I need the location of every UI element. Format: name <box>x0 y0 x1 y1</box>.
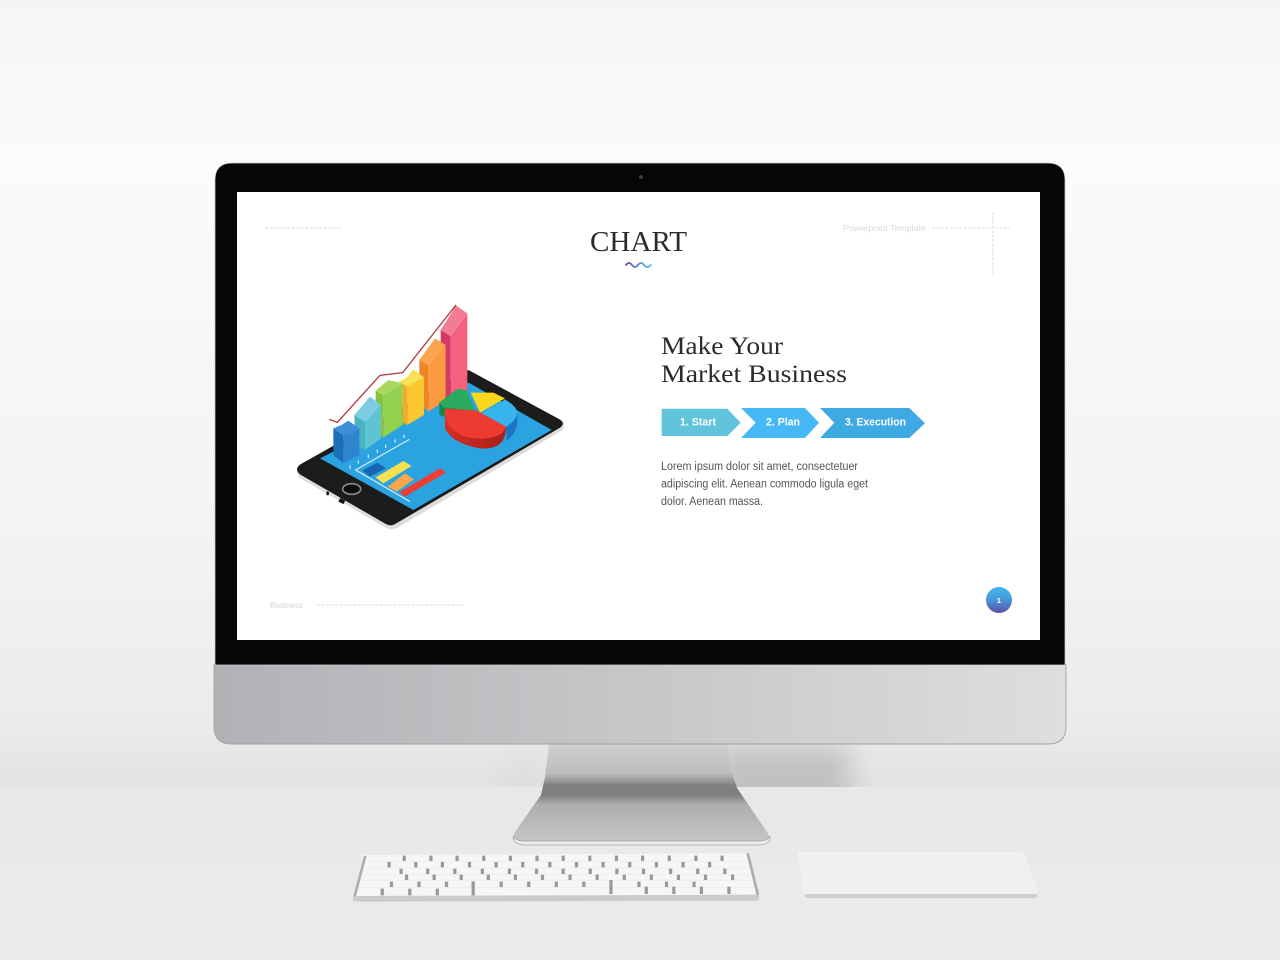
page number badge: 1 <box>997 596 1001 605</box>
arrow: plan <box>741 408 819 438</box>
heading: Market Business <box>661 361 847 388</box>
arrow: plan: 2. Plan <box>766 416 800 428</box>
trackpad <box>798 852 1038 898</box>
3D bars and trend line <box>329 305 467 463</box>
heading: Make Your <box>661 333 784 360</box>
page number badge <box>986 587 1012 613</box>
illustration: isometric tablet with charts <box>297 305 563 529</box>
title: CHART <box>590 226 687 258</box>
small bar chart <box>350 435 446 502</box>
monitor stand <box>513 744 770 845</box>
header right label: Powerpoint Template <box>843 223 926 233</box>
body text: dolor. Aenean massa. <box>661 496 763 508</box>
body text: adipiscing elit. Aenean commodo ligula eget <box>661 478 869 490</box>
tablet screen <box>320 383 552 510</box>
footer label: Business <box>270 600 303 610</box>
3D bar: yellow <box>398 369 424 425</box>
monitor bezel <box>215 163 1065 665</box>
header right dashed cross <box>932 212 1010 276</box>
monitor chin <box>214 664 1066 744</box>
3D bar: green <box>376 380 403 437</box>
process arrows <box>662 408 925 438</box>
key gaps <box>382 856 733 895</box>
screen <box>237 192 1040 640</box>
camera <box>639 175 643 179</box>
pie chart <box>439 388 517 448</box>
monitor <box>214 163 1066 744</box>
red trend line <box>329 305 456 422</box>
arrow: execution: 3. Execution <box>845 416 906 428</box>
tablet body <box>297 371 563 529</box>
home button and ports <box>326 484 361 504</box>
footer dashed rule <box>317 604 464 606</box>
icon: wave underline <box>626 263 651 267</box>
arrow: start: 1. Start <box>680 416 716 428</box>
keyboard <box>353 853 759 902</box>
arrow: start <box>662 409 741 436</box>
arrow: execution <box>820 408 925 438</box>
3D bar: orange <box>419 338 446 412</box>
3D bar: teal <box>354 397 381 450</box>
body text <box>661 461 869 508</box>
chart axes and ticks <box>350 435 410 502</box>
chart bars <box>362 461 446 497</box>
3D bar: pink <box>441 306 467 402</box>
heading <box>661 333 847 388</box>
3D bar: blue <box>333 421 359 463</box>
header left dashed rule <box>265 227 342 229</box>
body text: Lorem ipsum dolor sit amet, consectetuer <box>661 461 858 473</box>
